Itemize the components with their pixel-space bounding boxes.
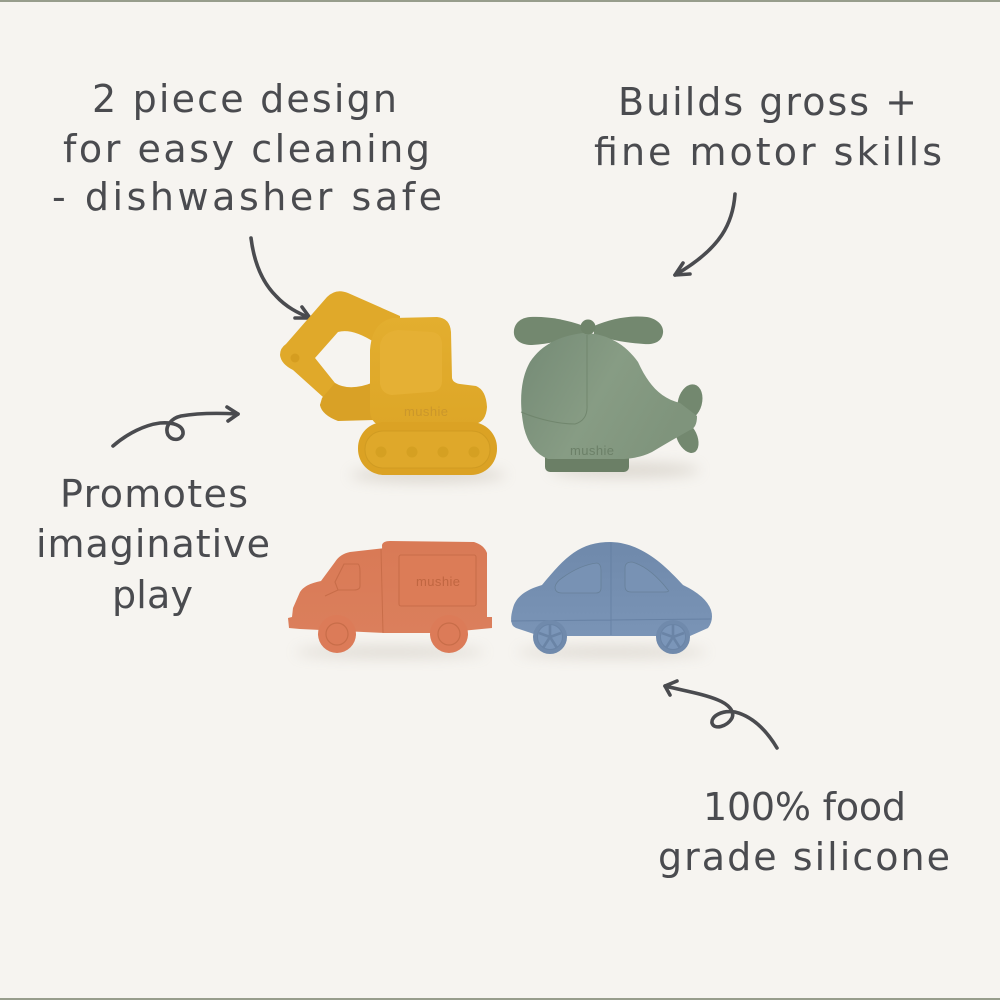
callout: imaginative play: play bbox=[112, 573, 193, 617]
toy: excavator bbox=[280, 291, 506, 482]
callout: motor skills bbox=[594, 80, 942, 174]
toy: delivery truck bbox=[288, 541, 492, 657]
arrow: looped to car bbox=[665, 681, 777, 748]
callout: motor skills: Builds gross + bbox=[618, 80, 917, 124]
logo: mushie on truck: mushie bbox=[416, 574, 460, 589]
logo: mushie on helicopter: mushie bbox=[570, 443, 614, 458]
callout: food grade silicone bbox=[658, 785, 950, 879]
logo: mushie on excavator: mushie bbox=[404, 404, 448, 419]
callout: 2 piece design bbox=[52, 77, 442, 219]
arrow: to excavator bbox=[251, 238, 310, 318]
arrow: looped to excavator bbox=[113, 407, 238, 446]
callout: imaginative play: Promotes bbox=[60, 472, 248, 516]
toy: car bbox=[511, 542, 712, 657]
callout: food grade silicone: grade silicone bbox=[658, 835, 950, 879]
callout: imaginative play bbox=[36, 472, 270, 617]
callout: 2 piece design: for easy cleaning bbox=[63, 127, 430, 171]
callout: 2 piece design: 2 piece design bbox=[92, 77, 397, 121]
wheel: front bbox=[656, 620, 690, 654]
wheel: rear bbox=[533, 620, 567, 654]
toy: helicopter bbox=[514, 316, 706, 477]
callout: motor skills: fine motor skills bbox=[594, 130, 942, 174]
arrow: to helicopter bbox=[675, 194, 735, 275]
callout: imaginative play: imaginative bbox=[36, 522, 270, 566]
callout: 2 piece design: - dishwasher safe bbox=[52, 175, 442, 219]
callout: food grade silicone: 100% food bbox=[703, 785, 906, 829]
